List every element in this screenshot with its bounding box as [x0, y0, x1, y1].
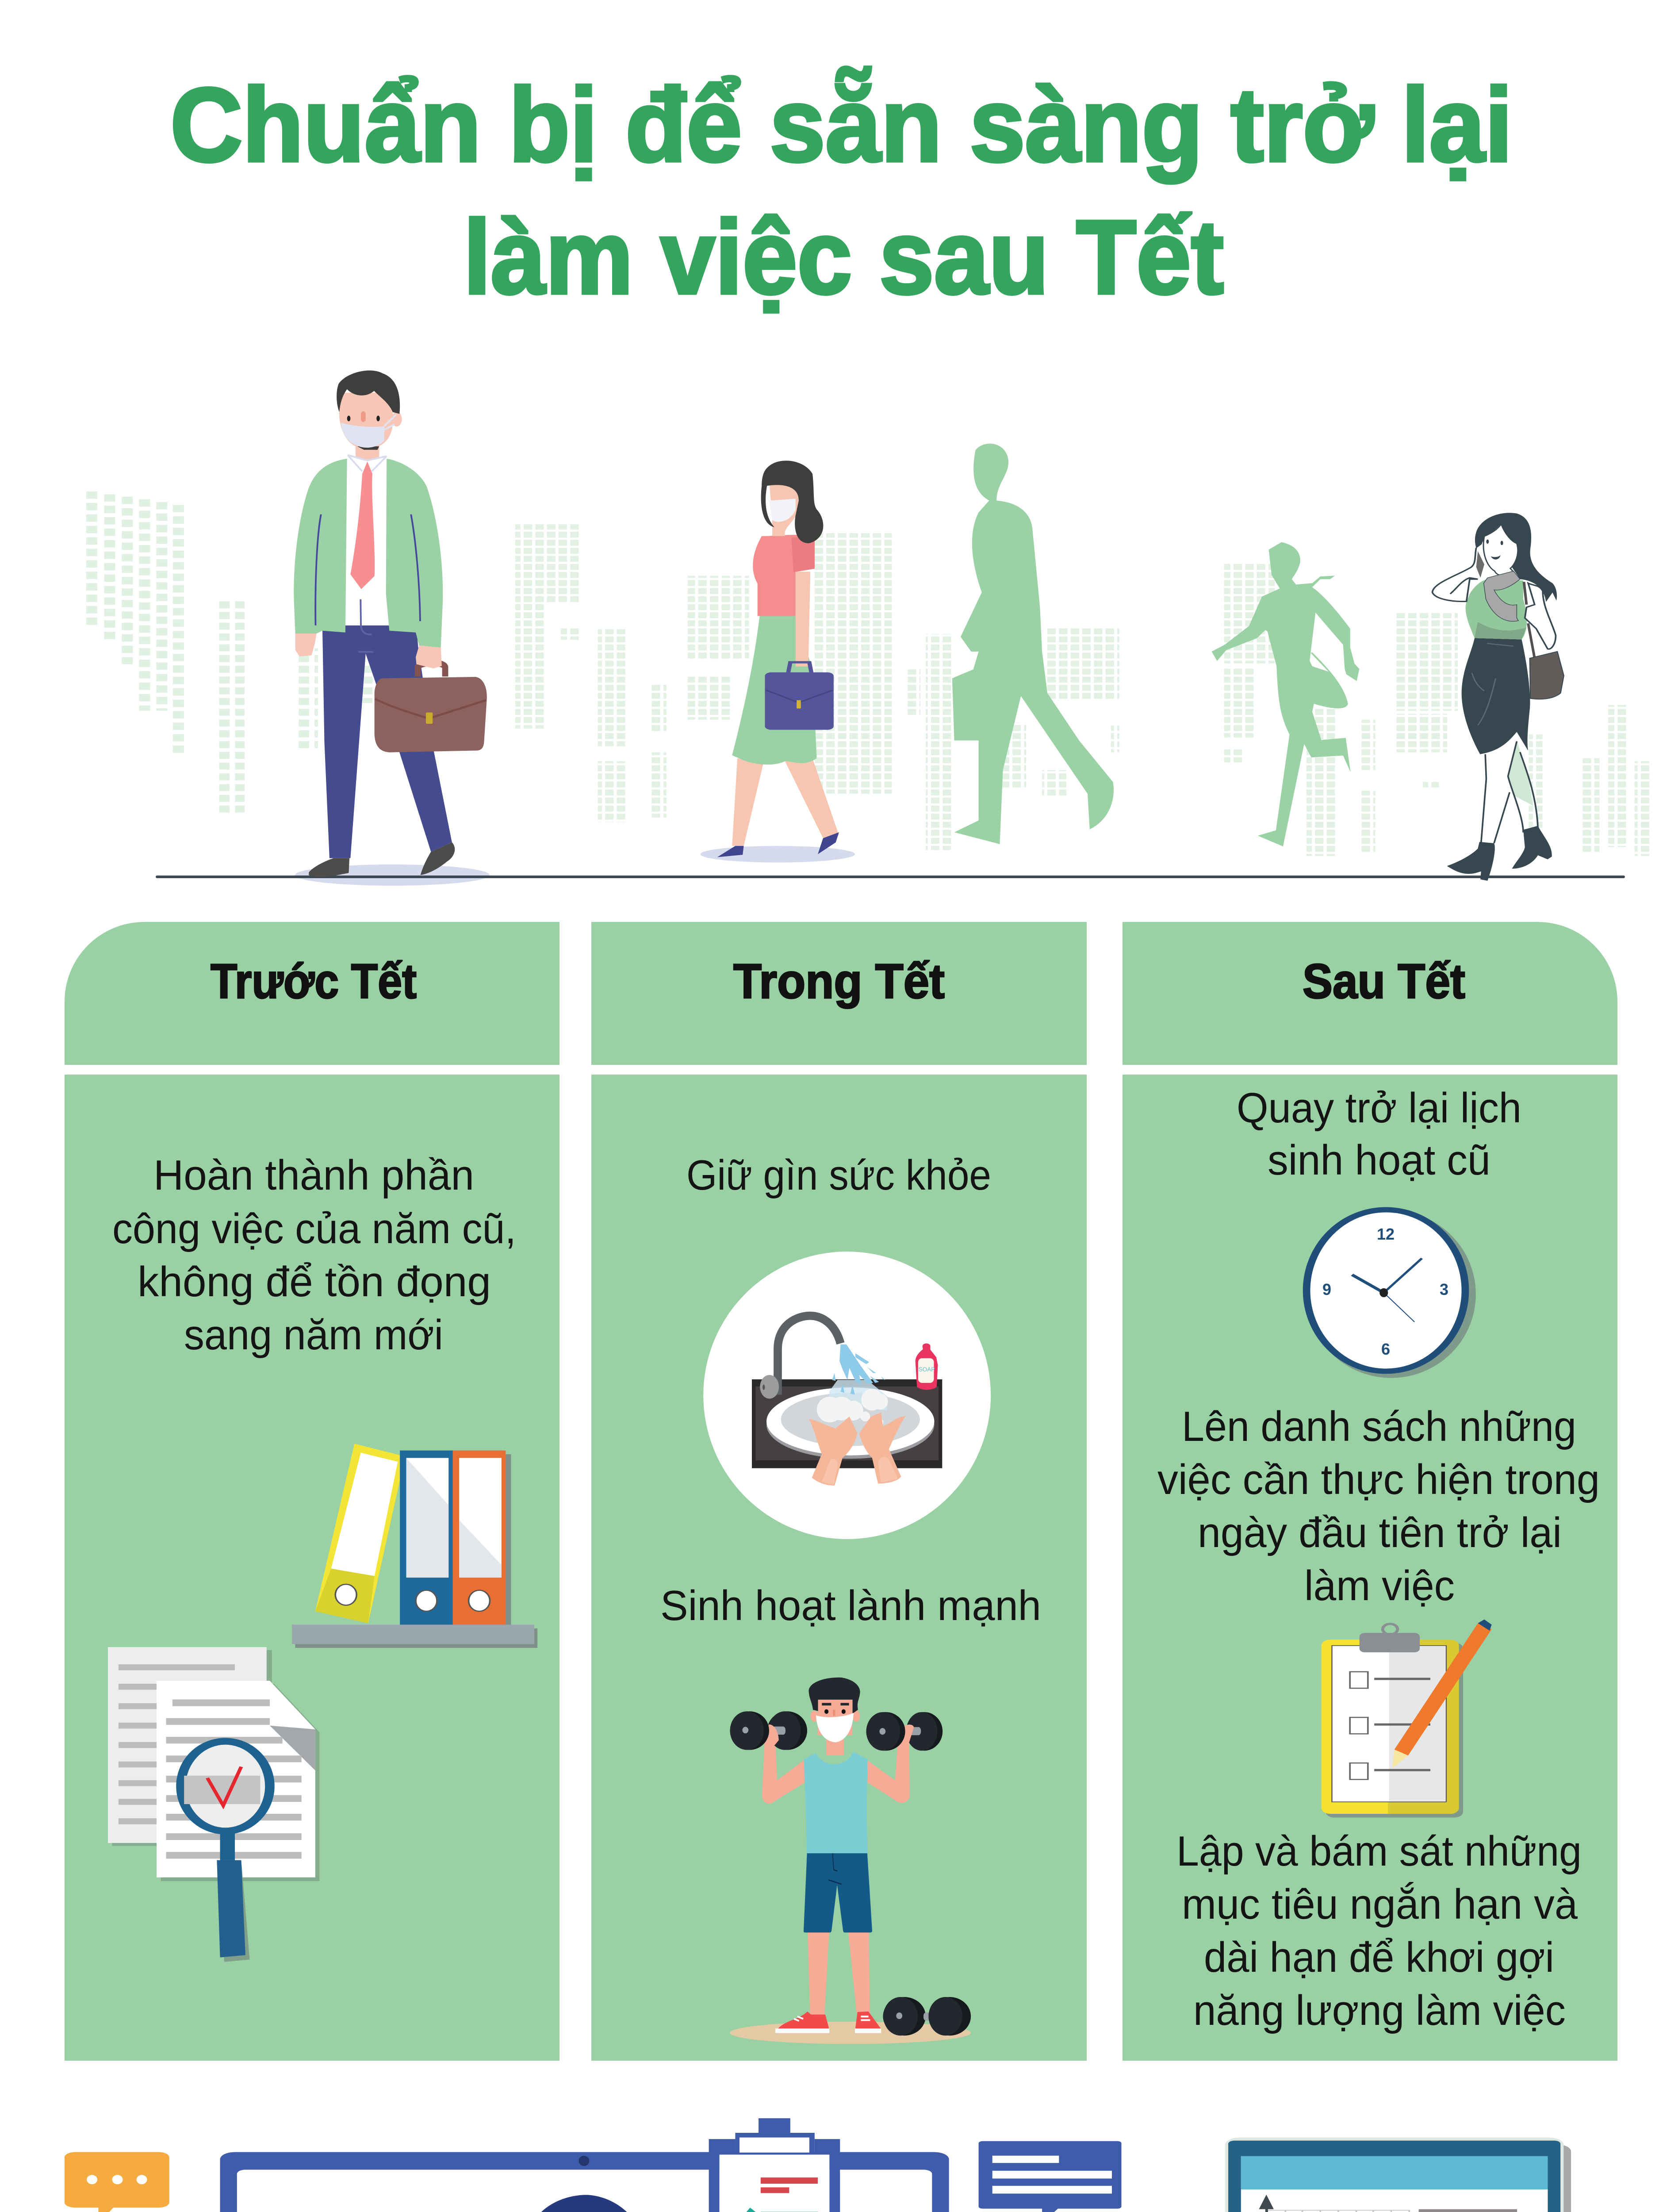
monitor	[200, 2152, 969, 2212]
illustration: city skyline backdrop	[86, 492, 1652, 856]
panel body: Trong Tết	[591, 1075, 1087, 2061]
figure: woman in pink top with blue bag	[701, 461, 855, 863]
speech bubble: orange	[65, 2152, 169, 2212]
icon: wall clock	[1307, 1210, 1476, 1378]
panel header: Trong Tết: Trong Tết	[733, 954, 945, 1009]
panel header: Trước Tết	[65, 922, 559, 1065]
text: make a to-do list: làm việc	[1304, 1562, 1455, 1609]
text: keep healthy: Giữ gìn sức khỏe	[686, 1152, 991, 1199]
panel header: Trước Tết: Trước Tết	[211, 954, 417, 1009]
text: set short and long term goals: Lập và bám sát những	[1176, 1828, 1582, 1875]
title	[170, 66, 1513, 316]
panel body: Trước Tết	[65, 1075, 559, 2061]
panel: Trong Tết	[591, 922, 1087, 2061]
icon: man lifting dumbbells	[730, 1678, 971, 2044]
figure: running silhouette	[1211, 542, 1359, 846]
text: set short and long term goals: dài hạn để khơi gợi	[1204, 1934, 1554, 1981]
panel header: Sau Tết	[1123, 922, 1617, 1065]
icon: documents and magnifier	[108, 1647, 319, 1962]
text: set short and long term goals: mục tiêu ngắn hạn và	[1182, 1881, 1578, 1928]
checklist clipboard	[709, 2118, 840, 2212]
monitor with chart	[1225, 2138, 1571, 2212]
text: return to old schedule: sinh hoạt cũ	[1268, 1137, 1490, 1184]
illustration: video meeting scene	[42, 2118, 1571, 2212]
panel header: Trong Tết	[591, 922, 1087, 1065]
text: finish last year's work: sang năm mới	[184, 1311, 443, 1359]
icon: hand washing at a sink: SOAP	[919, 1366, 935, 1373]
icon: clipboard and pencil	[1322, 1620, 1492, 1817]
figure: man with mask and briefcase	[294, 370, 487, 877]
figure: woman on the phone	[1433, 513, 1564, 881]
icon: wall clock: 12	[1377, 1225, 1395, 1243]
ground line	[156, 876, 1625, 878]
text: finish last year's work: không để tồn đọng	[138, 1258, 491, 1306]
text: make a to-do list: ngày đầu tiên trở lại	[1198, 1509, 1562, 1556]
text: return to old schedule	[1237, 1084, 1521, 1184]
title: Chuẩn bị để sẵn sàng trở lại	[170, 66, 1513, 184]
text: finish last year's work: Hoàn thành phần	[153, 1152, 474, 1199]
figure: walking silhouette	[952, 444, 1114, 844]
icon: wall clock: 9	[1322, 1280, 1331, 1298]
text: make a to-do list: việc cần thực hiện trong	[1157, 1456, 1600, 1503]
icon: wall clock: 6	[1381, 1340, 1390, 1358]
text: set short and long term goals: năng lượng làm việc	[1193, 1987, 1566, 2034]
text: set short and long term goals	[1176, 1828, 1582, 2034]
title: làm việc sau Tết	[464, 199, 1224, 316]
icon: wall clock: 3	[1440, 1280, 1448, 1298]
text: finish last year's work: công việc của năm cũ,	[112, 1205, 516, 1252]
shadow under man	[295, 864, 490, 886]
presenter woman on screen	[541, 2195, 627, 2212]
icon: hand washing at a sink	[703, 1252, 991, 1539]
icon: binders on a shelf	[292, 1444, 537, 1648]
text: make a to-do list	[1157, 1403, 1600, 1609]
text: return to old schedule: Quay trở lại lịch	[1237, 1084, 1521, 1132]
text: finish last year's work	[112, 1152, 516, 1359]
panel body: Sau Tết	[1123, 1075, 1617, 2061]
panel: Trước Tết	[65, 922, 559, 2061]
panel header: Sau Tết: Sau Tết	[1303, 954, 1465, 1009]
panel: Sau Tết	[1123, 922, 1617, 2061]
speech bubble: blue	[979, 2141, 1122, 2212]
text: healthy lifestyle: Sinh hoạt lành mạnh	[660, 1582, 1041, 1629]
text: make a to-do list: Lên danh sách những	[1182, 1403, 1576, 1450]
